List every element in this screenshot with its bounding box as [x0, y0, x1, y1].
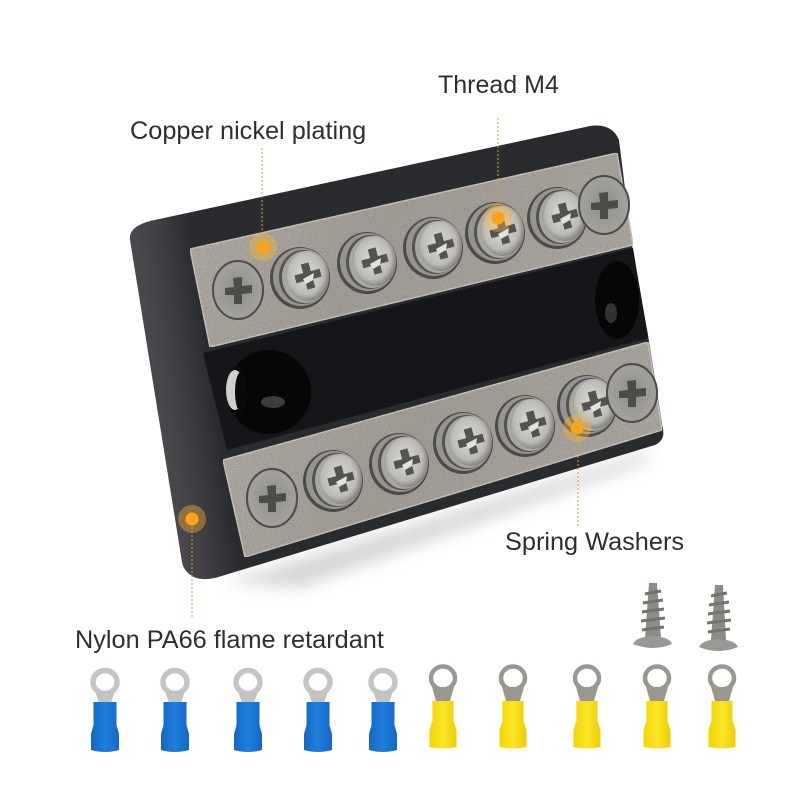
- callout: copper nickel plating: [130, 117, 366, 261]
- yellow terminal 5: [708, 666, 736, 748]
- yellow terminal 2: [500, 666, 526, 748]
- icon: self-tapping screw left: [633, 583, 672, 648]
- top bar screws: [213, 176, 629, 319]
- callout: copper nickel plating: Copper nickel plating: [130, 117, 366, 145]
- callout: spring washers: Spring Washers: [505, 528, 684, 556]
- callout: nylon PA66 flame retardant: [75, 505, 384, 654]
- yellow terminal 1: [430, 666, 456, 748]
- yellow terminal 4: [644, 666, 670, 748]
- callout: thread M4: [438, 71, 559, 232]
- blue terminal 2: [161, 670, 189, 752]
- callout: spring washers: [505, 414, 684, 556]
- blue ring terminals: [91, 670, 397, 752]
- yellow terminal 3: [574, 666, 600, 748]
- bottom bar screws: [247, 364, 657, 527]
- bottom terminal bar: [223, 342, 662, 557]
- product: bus bar block: [130, 126, 663, 579]
- mounting hole left: [226, 350, 311, 434]
- callout: thread M4: Thread M4: [438, 71, 559, 99]
- callout: nylon PA66 flame retardant: Nylon PA66 flame retardant: [75, 626, 384, 654]
- blue terminal 5: [369, 670, 397, 752]
- mounting screws: [633, 583, 738, 651]
- recessed centre channel: [203, 248, 648, 450]
- top terminal bar: [190, 153, 633, 347]
- yellow ring terminals: [430, 666, 736, 748]
- blue terminal 1: [91, 670, 119, 752]
- icon: self-tapping screw right: [699, 585, 738, 651]
- mounting hole right: [595, 261, 639, 339]
- blue terminal 4: [304, 670, 332, 752]
- blue terminal 3: [234, 670, 262, 752]
- soft shadow under block: [225, 450, 655, 588]
- black nylon housing: [130, 126, 663, 579]
